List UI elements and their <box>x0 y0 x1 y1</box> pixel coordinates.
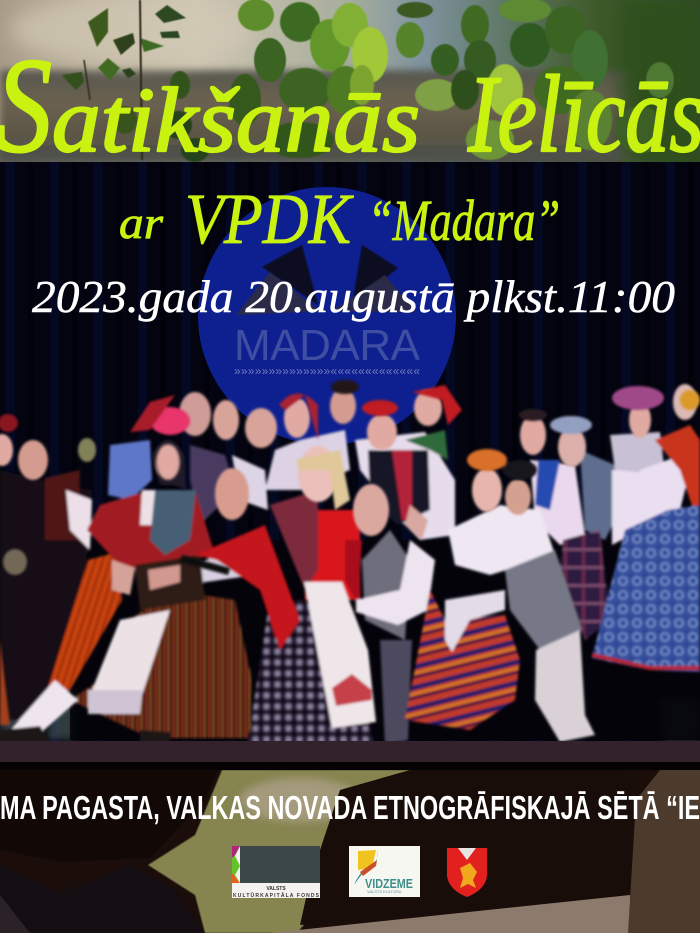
orange skirt <box>43 552 122 705</box>
Vidzeme wordmark: VIDZEME <box>365 876 413 891</box>
man white shirt with microphone <box>185 540 260 585</box>
center skirt <box>247 600 375 748</box>
logo caption second line: KULTŪRKAPITĀLA FONDS <box>233 892 320 899</box>
hair, scarves and flowers <box>0 380 700 725</box>
left leg <box>12 680 78 738</box>
subtitle: ar VPDK Madara: “Madara” <box>368 188 560 253</box>
dark stage curtain <box>0 162 700 745</box>
blue Madara emblem circle <box>198 187 456 445</box>
red jacket woman <box>87 490 215 570</box>
faces <box>0 384 697 536</box>
Vidzeme tagline: VALSTS KULTŪRA <box>367 889 402 894</box>
top photo: birch leaves background <box>0 0 700 162</box>
man in grey vest <box>362 530 410 640</box>
floor glow <box>0 690 700 740</box>
title: atikšanās <box>52 69 420 171</box>
birch leaf clusters <box>62 0 674 162</box>
subtitle: ar VPDK Madara: ar <box>119 197 164 248</box>
striped skirt right <box>405 590 520 730</box>
hands and necks <box>112 560 135 595</box>
brown striped skirt <box>70 590 252 738</box>
stage edge plank <box>0 741 700 770</box>
emblem lettering: MADARA <box>234 321 421 370</box>
subtitle: ar VPDK Madara <box>119 179 560 259</box>
white blouse pair <box>448 505 555 575</box>
subtitle: ar VPDK Madara: VPDK <box>185 179 355 259</box>
red shawl and top <box>195 525 300 650</box>
bottom photo: log wall and grass <box>0 745 700 933</box>
white apron <box>88 610 170 712</box>
coat of arms shield <box>447 848 487 897</box>
date and time line: 2023.gada 20.augustā plkst.11:00 <box>32 271 675 322</box>
logo caption: VALSTS <box>266 886 286 892</box>
title <box>0 31 700 181</box>
logo: Valsts Kultūrkapitāla fonds <box>232 846 320 899</box>
emblem ornament band: »»»»»»»»»»»»»»««««««««««««« <box>234 364 420 378</box>
back row bodies <box>0 425 700 720</box>
blue patterned skirt <box>592 505 700 672</box>
white embroidered apron <box>304 582 376 728</box>
dance group photo <box>0 380 700 748</box>
logo: Vidzeme <box>349 846 420 897</box>
